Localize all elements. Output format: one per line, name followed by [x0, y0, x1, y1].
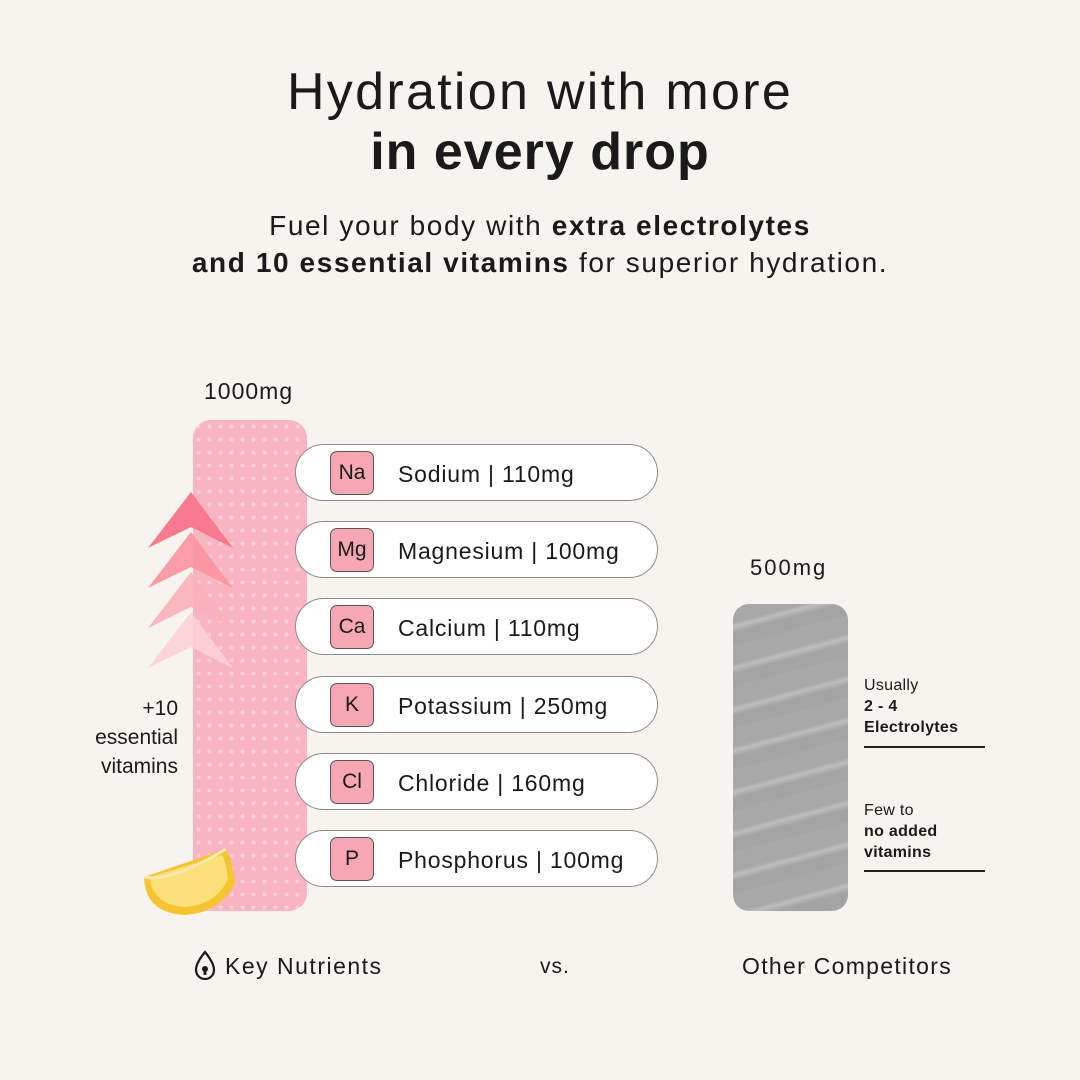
vitamins text: essential — [95, 726, 178, 749]
pill: potassium: K — [345, 693, 359, 716]
pill: potassium: Potassium | 250mg — [398, 693, 608, 719]
pill: calcium: Ca — [339, 615, 365, 638]
subtitle — [192, 210, 888, 278]
pill: phosphorus: Phosphorus | 100mg — [398, 847, 624, 873]
pill: sodium — [295, 444, 658, 501]
label: 500mg: 500mg — [750, 555, 827, 580]
pill: chloride — [295, 753, 658, 810]
chevron arrows — [148, 492, 233, 668]
pill: magnesium — [295, 521, 658, 578]
competitor note: electrolytes: Usually — [864, 677, 919, 694]
title — [287, 63, 793, 181]
title: Hydration with more — [287, 63, 793, 121]
pink bar — [193, 420, 307, 911]
label: 1000mg: 1000mg — [204, 378, 293, 404]
pill: calcium: Calcium | 110mg — [398, 615, 580, 641]
pill: potassium — [295, 676, 658, 733]
pill: magnesium: Magnesium | 100mg — [398, 538, 620, 564]
competitor note: vitamins: no added — [864, 823, 938, 840]
competitor note: vitamins: Few to — [864, 802, 914, 819]
grey bar — [733, 604, 848, 911]
title: in every drop — [370, 123, 710, 181]
icon: lemon — [144, 848, 235, 915]
competitor note: electrolytes: Electrolytes — [864, 719, 958, 736]
pill: calcium — [295, 598, 658, 655]
brand: Key Nutrients: Key Nutrients — [225, 953, 383, 979]
pill: phosphorus — [295, 830, 658, 887]
competitor note: vitamins — [864, 802, 938, 861]
vs: vs. — [540, 955, 570, 978]
vitamins text: vitamins — [101, 755, 178, 778]
pill: sodium: Sodium | 110mg — [398, 461, 575, 487]
subtitle: and 10 essential vitamins for superior hydration. — [192, 247, 888, 278]
subtitle: Fuel your body with extra electrolytes — [269, 210, 811, 241]
pill: chloride: Cl — [342, 770, 362, 793]
competitor note: electrolytes — [864, 677, 958, 736]
pill: sodium: Na — [339, 461, 365, 484]
competitor note: vitamins: vitamins — [864, 844, 931, 861]
label: Other Competitors: Other Competitors — [742, 953, 952, 979]
vitamins text — [95, 697, 178, 778]
competitor note: electrolytes: 2 - 4 — [864, 698, 898, 715]
icon: drop keyhole — [194, 950, 216, 980]
pill: magnesium: Mg — [337, 538, 367, 561]
vitamins text: +10 — [142, 697, 178, 720]
pill: chloride: Chloride | 160mg — [398, 770, 586, 796]
pill: phosphorus: P — [345, 847, 359, 870]
